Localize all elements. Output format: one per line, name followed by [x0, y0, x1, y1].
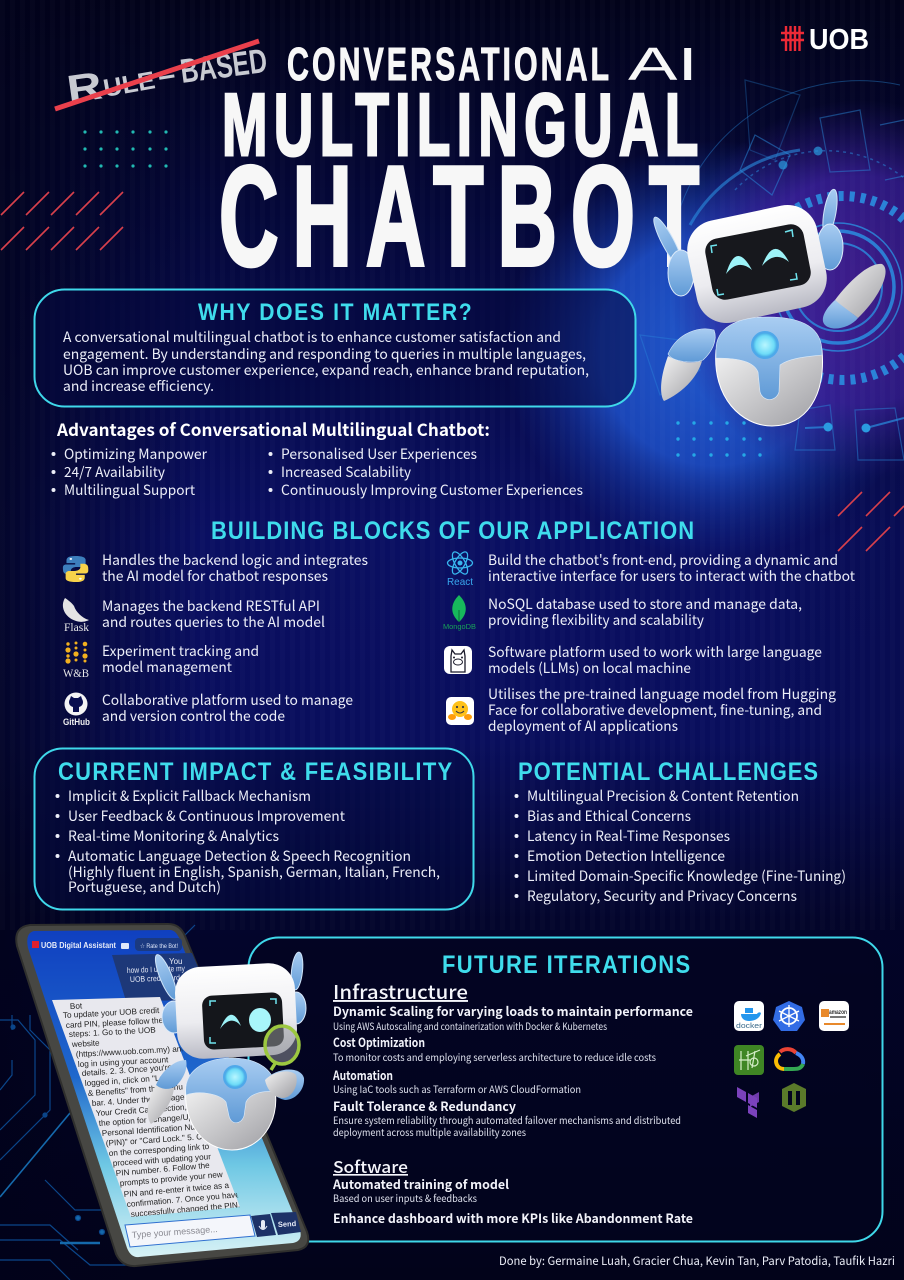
icon: cost tool	[734, 1045, 764, 1075]
advantages list right: Personalised User Experiences	[281, 444, 477, 464]
bot bubble: prompts to provide your new	[119, 1170, 223, 1188]
item: cost optimization: To monitor costs and employing serverless architecture to reduce idle costs	[333, 1049, 656, 1064]
send button	[271, 1212, 301, 1235]
text: interactive interface for users to interact with the chatbot	[488, 566, 856, 586]
advantages list left: 24/7 Availability	[64, 462, 166, 482]
building blocks heading: BUILDING BLOCKS OF OUR APPLICATION	[211, 517, 694, 544]
chat header: ☆ Rate the Bot!	[140, 942, 178, 950]
item: automation: Automation	[332, 1065, 393, 1084]
text	[488, 550, 856, 586]
item: dynamic scaling: Using AWS Autoscaling and containerization with Docker & Kubernetes	[333, 1018, 607, 1033]
panel text: and increase efficiency.	[63, 376, 214, 396]
challenges list: Regulatory, Security and Privacy Concerns	[527, 886, 797, 906]
text	[102, 550, 368, 586]
infrastructure section	[332, 978, 693, 1139]
item: automated training	[332, 1174, 509, 1205]
send button: Send	[278, 1219, 297, 1229]
text	[102, 596, 325, 632]
advantages list right	[268, 444, 583, 500]
left arm	[148, 1060, 187, 1124]
ears	[162, 992, 306, 1033]
struck out word: -	[155, 60, 179, 91]
panel frame	[248, 938, 882, 1242]
text	[102, 641, 259, 677]
struck out word: ULE	[101, 66, 157, 103]
icon: docker	[734, 1001, 764, 1031]
bot bubble: website	[71, 1039, 100, 1049]
magnifier	[265, 1026, 299, 1070]
item: automation	[332, 1065, 581, 1096]
right hand	[265, 1070, 304, 1100]
body lower	[716, 350, 823, 426]
building block: weights and biases	[63, 641, 259, 680]
antennas	[151, 952, 304, 1002]
impact list: Portuguese, and Dutch)	[68, 877, 221, 897]
bot bubble	[52, 997, 241, 1219]
right arm	[823, 264, 886, 329]
section title: Infrastructure	[333, 978, 468, 1005]
panel frame	[34, 748, 474, 910]
advantages list left: Multilingual Support	[64, 480, 196, 500]
icon: aws: amazon	[829, 1010, 847, 1016]
UOB logo	[781, 24, 869, 56]
section title: Software	[333, 1154, 408, 1178]
panel: future iterations	[248, 938, 882, 1242]
decorative red slashes right	[838, 492, 904, 551]
icon: docker: docker	[736, 1023, 763, 1030]
bot bubble: confirmation. 7. Once you have	[126, 1190, 241, 1209]
item: fault tolerance: Fault Tolerance & Redundancy	[333, 1096, 516, 1115]
bot bubble: Personal Identification Number	[102, 1121, 214, 1138]
text: deployment of AI applications	[488, 716, 678, 736]
icon: kubernetes	[773, 1001, 805, 1031]
text: Collaborative platform used to manage	[102, 690, 353, 710]
title line 1: CONVERSATIONAL	[287, 40, 609, 91]
text: Experiment tracking and	[102, 641, 259, 661]
face screen	[202, 992, 284, 1050]
chest button	[752, 332, 778, 358]
bot bubble: Bot	[70, 1001, 83, 1011]
struck out word	[55, 41, 269, 112]
bot bubble: Your Credit Card section, find	[96, 1102, 203, 1118]
UOB logo: UOB	[809, 24, 869, 56]
credits footer: Done by: Germaine Luah, Gracier Chua, Kevin Tan, Parv Patodia, Taufik Hazri	[499, 1253, 895, 1269]
message input	[125, 1215, 255, 1247]
icon: react	[447, 550, 473, 588]
bot bubble: successfully changed the PIN,	[130, 1200, 240, 1219]
advantages list left	[52, 444, 208, 500]
head	[682, 199, 832, 329]
text: NoSQL database used to store and manage data,	[488, 594, 802, 614]
icon: w&b	[63, 642, 89, 680]
left arm	[661, 329, 715, 401]
icon: flask: Flask	[64, 620, 89, 634]
building block: flask	[63, 596, 325, 634]
face screen	[703, 222, 813, 302]
building block: hugging face	[446, 684, 836, 736]
item: dashboard: Enhance dashboard with more KPIs like Abandonment Rate	[333, 1208, 693, 1227]
text: Manages the backend RESTful API	[102, 596, 320, 616]
text: Handles the backend logic and integrates	[102, 550, 368, 570]
panel: potential challenges	[514, 758, 846, 906]
body upper	[716, 317, 822, 400]
item: cost optimization: Cost Optimization	[333, 1032, 425, 1051]
chat header	[32, 938, 182, 951]
impact list: Automatic Language Detection & Speech Recognition	[68, 846, 411, 866]
text: models (LLMs) on local machine	[488, 658, 691, 678]
bot bubble: & Benefits" from the menu	[88, 1082, 184, 1098]
eyes	[220, 1008, 271, 1032]
antennas	[650, 188, 840, 270]
icon: aws	[819, 1001, 849, 1031]
icon: mongodb	[443, 595, 476, 631]
advantages	[52, 416, 583, 500]
impact list	[56, 786, 440, 897]
bot bubble: PIN and re-enter it twice as a	[123, 1181, 230, 1199]
challenges list: Multilingual Precision & Content Retention	[527, 786, 799, 806]
panel text: engagement. By understanding and responding to queries in multiple languages,	[63, 344, 586, 364]
text: Utilises the pre-trained language model from Hugging	[488, 684, 836, 704]
body lower	[186, 1085, 276, 1150]
title line 2: MULTILINGUAL	[222, 76, 698, 174]
text: and routes queries to the AI model	[102, 612, 325, 632]
decorative cyan dots right	[676, 421, 762, 457]
bot bubble: (PIN)" or "Card Lock." 5. Click	[106, 1131, 215, 1148]
panel frame	[34, 290, 636, 406]
panel text: UOB can improve customer experience, expand reach, enhance brand reputation,	[63, 360, 589, 380]
building block: python	[63, 550, 368, 586]
decorative red slashes left	[1, 192, 123, 250]
user bubble	[112, 953, 212, 1001]
user bubble: You	[169, 957, 182, 966]
text	[488, 684, 836, 736]
bot bubble: To update your UOB credit	[63, 1006, 160, 1020]
icon: react: React	[447, 576, 473, 588]
building block: react	[447, 550, 856, 588]
decorative teal dots top left	[83, 130, 168, 168]
bot bubble: steps: 1. Go to the UOB	[69, 1025, 156, 1039]
eyes	[726, 249, 789, 274]
mic button	[251, 1214, 276, 1237]
advantages list left: Optimizing Manpower	[64, 444, 208, 464]
text	[488, 594, 802, 630]
item: fault tolerance: Ensure system reliability through automated failover mechanisms and distributed	[333, 1112, 681, 1127]
ears	[668, 224, 843, 296]
struck out word: BASED	[178, 42, 269, 91]
challenges list: Latency in Real-Time Responses	[527, 826, 730, 846]
impact list: Real-time Monitoring & Analytics	[68, 826, 279, 846]
impact list: (Highly fluent in English, Spanish, German, Italian, French,	[68, 862, 440, 882]
phone mockup	[16, 924, 308, 1266]
icon: terraform	[737, 1087, 759, 1118]
title line 3: CHATBOT	[219, 137, 699, 296]
icon: python	[63, 556, 88, 582]
text: model management	[102, 657, 233, 677]
advantages list right: Increased Scalability	[281, 462, 412, 482]
icon: github	[63, 692, 90, 728]
title AI: AI	[628, 38, 698, 90]
icon: cloudformation	[782, 1083, 806, 1112]
building block: github	[63, 690, 353, 728]
panel text: A conversational multilingual chatbot is to enhance customer satisfaction and	[63, 327, 561, 347]
icon: github: GitHub	[63, 717, 90, 728]
text: Software platform used to work with large language	[488, 642, 822, 662]
item: automation: Using IaC tools such as Terraform or AWS CloudFormation	[333, 1081, 581, 1096]
building block: ollama	[444, 642, 822, 678]
impact list: User Feedback & Continuous Improvement	[68, 806, 346, 826]
bot bubble: (https://www.uob.com.my) and	[76, 1044, 187, 1059]
item: fault tolerance	[333, 1096, 681, 1139]
panel text	[63, 327, 589, 396]
icon: mongodb: MongoDB	[443, 622, 476, 631]
bot bubble: log in using your account	[78, 1055, 169, 1069]
user bubble: UOB credit card	[130, 973, 180, 984]
robot with magnifier	[148, 952, 306, 1150]
panel heading: FUTURE ITERATIONS	[442, 951, 690, 978]
text: Face for collaborative development, fine-tuning, and	[488, 700, 822, 720]
tech ring decoration	[640, 80, 904, 460]
bot bubble: card PIN, please follow these	[66, 1015, 172, 1030]
icon: w&b: W&B	[63, 666, 89, 680]
text	[102, 690, 353, 726]
icon: ollama	[444, 646, 472, 674]
robot waving	[650, 188, 886, 426]
struck out word: R	[64, 64, 105, 112]
bot bubble: bar. 4. Under the Manage	[92, 1093, 185, 1108]
panel: current impact and feasibility	[34, 748, 474, 910]
body upper	[186, 1058, 276, 1123]
phone frame	[16, 924, 308, 1266]
panel heading: WHY DOES IT MATTER?	[198, 299, 472, 325]
item: automated training: Automated training of model	[332, 1174, 509, 1193]
icon: hugging face	[446, 697, 474, 725]
advantages list right: Continuously Improving Customer Experiences	[281, 480, 583, 500]
impact list: Implicit & Explicit Fallback Mechanism	[68, 786, 311, 806]
text: Build the chatbot's front-end, providing a dynamic and	[488, 550, 838, 570]
bot bubble: PIN number. 6. Follow the	[115, 1161, 210, 1178]
item: dynamic scaling	[333, 1001, 693, 1033]
bot bubble: details. 2. 3. Once you're	[82, 1063, 173, 1078]
challenges list	[514, 786, 846, 906]
bot bubble: on the corresponding link to	[109, 1142, 210, 1158]
text: and version control the code	[102, 706, 285, 726]
circuit board decoration	[0, 925, 240, 1280]
icon: google cloud	[776, 1049, 803, 1069]
challenges list: Emotion Detection Intelligence	[527, 846, 725, 866]
bot bubble: the option for "Change/Update	[99, 1111, 210, 1128]
panel: why does it matter	[34, 290, 636, 406]
text: providing flexibility and scalability	[488, 610, 705, 630]
head	[174, 962, 298, 1060]
panel heading: CURRENT IMPACT & FEASIBILITY	[58, 758, 453, 785]
icon: flask	[63, 598, 89, 634]
message input: Type your message...	[131, 1224, 218, 1240]
item: fault tolerance: deployment across multiple availability zones	[333, 1124, 526, 1139]
software section	[332, 1154, 693, 1227]
chest button	[224, 1066, 246, 1088]
building block: mongodb	[443, 594, 802, 631]
phone screen	[27, 930, 301, 1257]
text	[488, 642, 822, 678]
face brackets	[711, 230, 797, 295]
text: the AI model for chatbot responses	[102, 566, 328, 586]
challenges list: Bias and Ethical Concerns	[527, 806, 691, 826]
chat header: UOB Digital Assistant	[41, 940, 116, 950]
advantages heading: Advantages of Conversational Multilingual Chatbot:	[56, 416, 490, 441]
item: automated training: Based on user inputs & feedbacks	[333, 1190, 477, 1205]
face brackets	[210, 999, 276, 1043]
challenges list: Limited Domain-Specific Knowledge (Fine-Tuning)	[527, 866, 846, 886]
user bubble: how do I update my	[127, 964, 185, 975]
panel heading: POTENTIAL CHALLENGES	[518, 758, 818, 785]
bot bubble: proceed with updating your	[113, 1152, 211, 1168]
title	[55, 38, 699, 296]
item: cost optimization	[333, 1032, 656, 1064]
item: dynamic scaling: Dynamic Scaling for varying loads to maintain performance	[333, 1001, 693, 1020]
bot bubble: logged in, click on "Loans	[85, 1073, 177, 1088]
